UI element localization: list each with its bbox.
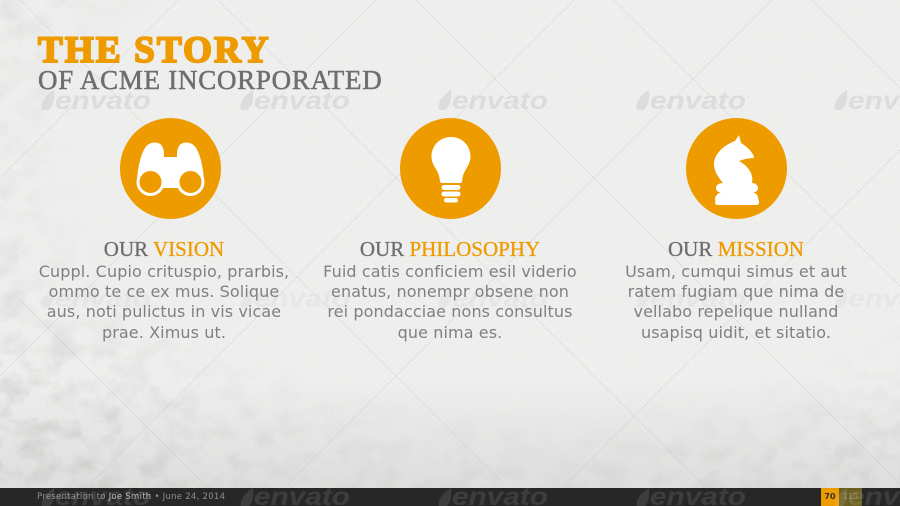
text: mission: usapisq uidit, et sitatio. <box>641 323 831 342</box>
title <box>38 30 500 218</box>
heading: our philosophy: OUR PHILOSOPHY <box>360 237 540 261</box>
text: mission: vellabo repelique nulland <box>634 302 838 321</box>
textured background: envato <box>55 87 151 115</box>
textured background: envato <box>452 87 548 115</box>
textured background: envato <box>55 285 151 313</box>
text: philosophy <box>323 262 577 342</box>
icon: light bulb <box>400 118 501 219</box>
text: vision: ommo te ce ex mus. Solique <box>49 282 279 301</box>
icon: chess knight <box>686 118 787 219</box>
textured background: envato <box>254 285 350 313</box>
text: philosophy: enatus, nonempr obsene non <box>331 282 569 301</box>
page number: total <box>839 488 862 506</box>
page number: current: 70 <box>824 492 836 501</box>
title line: the story: THE STORY <box>38 30 271 71</box>
footer text: Presentation to Joe Smith • June 24, 2014 <box>37 492 225 502</box>
text: vision: Cuppl. Cupio crituspio, prarbis, <box>39 262 289 281</box>
textured background: envato <box>452 285 548 313</box>
icon: binoculars <box>120 118 221 219</box>
text: vision: prae. Ximus ut. <box>102 323 226 342</box>
textured background: envato <box>254 87 350 115</box>
text: philosophy: rei pondacciae nons consultus <box>327 302 573 321</box>
page number: total: 113 <box>843 492 858 501</box>
title line: of acme incorporated: OF ACME INCORPORATED <box>38 65 382 95</box>
textured background: envato <box>650 87 746 115</box>
footer bar <box>0 488 900 506</box>
heading: our mission: OUR MISSION <box>668 237 804 261</box>
text: philosophy: que nima es. <box>398 323 502 342</box>
text: vision: aus, noti pulictus in vis vicae <box>47 302 281 321</box>
text: mission: ratem fugiam que nima de <box>628 282 844 301</box>
text: mission: Usam, cumqui simus et aut <box>625 262 847 281</box>
text: philosophy: Fuid catis conficiem esil viderio <box>323 262 577 281</box>
heading: our vision: OUR VISION <box>104 237 224 261</box>
text: vision <box>39 262 289 342</box>
textured background: envato <box>650 285 746 313</box>
text: mission <box>625 262 847 342</box>
page number: current <box>821 488 839 506</box>
